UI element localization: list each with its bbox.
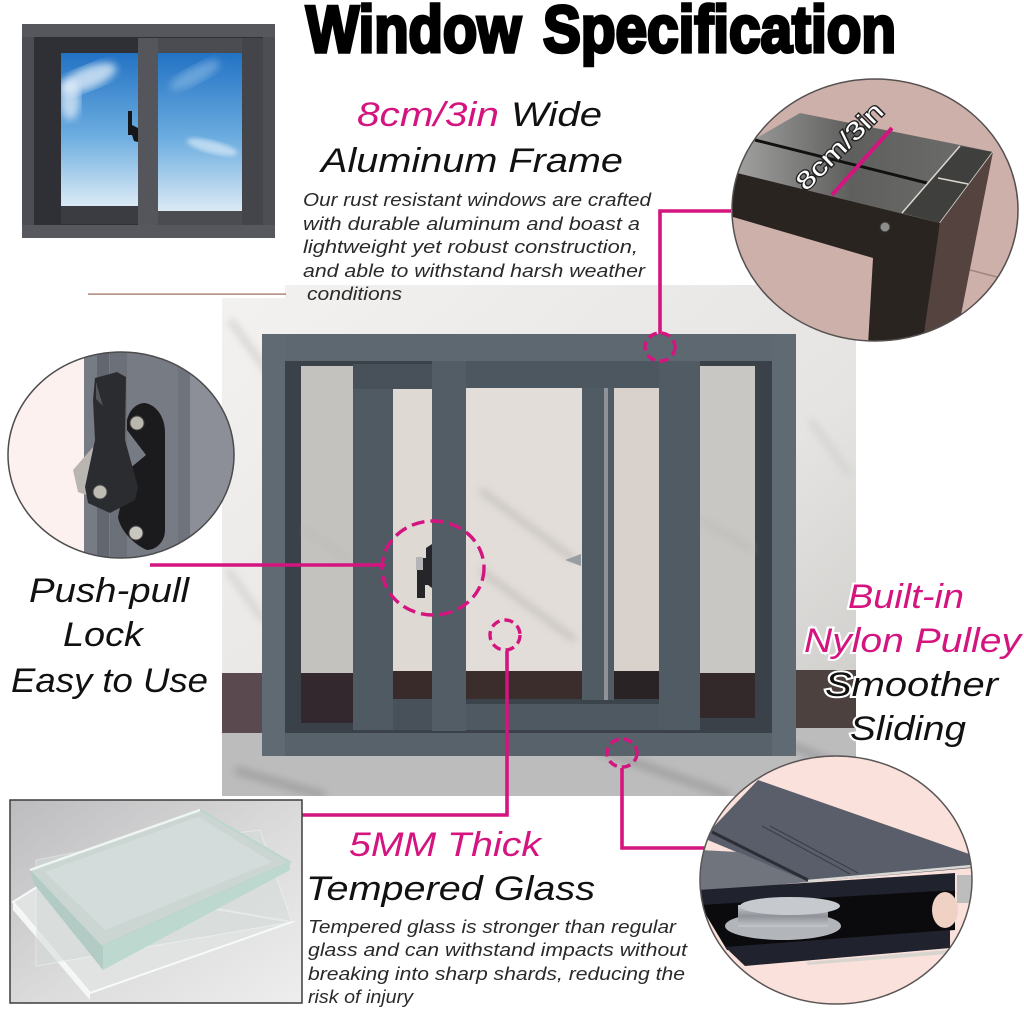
photo: tempered glass sheets — [10, 800, 302, 1003]
lever — [85, 372, 138, 513]
text block: glass description — [308, 917, 688, 1007]
marble wall photo background — [222, 285, 856, 796]
connector: frame callout — [645, 211, 731, 361]
text block: glass description: glass and can withstand impacts without — [308, 940, 688, 960]
heading: aluminum frame — [319, 96, 623, 180]
circle: frame corner detail — [725, 78, 1020, 345]
circle: lock detail — [8, 352, 238, 560]
icon: inner handle — [417, 544, 432, 598]
dimension label: 8cm/3in — [790, 97, 889, 196]
text block: frame description: conditions — [307, 284, 402, 304]
label: push-pull lock: Lock — [63, 616, 145, 654]
heading: aluminum frame: 8cm/3in — [357, 96, 499, 134]
heading: tempered glass — [306, 826, 595, 908]
label: nylon pulley — [804, 578, 1023, 748]
title — [306, 0, 896, 66]
label: nylon pulley: Nylon Pulley — [804, 622, 1023, 660]
label: nylon pulley: Sliding — [850, 710, 966, 748]
label: push-pull lock — [11, 572, 208, 700]
label: push-pull lock: Easy to Use — [11, 662, 208, 700]
text block: glass description: Tempered glass is stronger than regular — [308, 917, 677, 937]
heading: tempered glass: 5MM Thick — [349, 826, 543, 864]
heading: aluminum frame: Aluminum Frame — [319, 142, 623, 180]
screws — [130, 416, 144, 430]
label: push-pull lock: Push-pull — [29, 572, 191, 610]
text block: glass description: breaking into sharp shards, reducing the — [308, 964, 685, 984]
heading: tempered glass: Tempered Glass — [306, 870, 595, 908]
lock plate — [118, 403, 165, 550]
icon: latch keeper — [565, 554, 581, 566]
silver catch — [73, 447, 93, 497]
connector: lock callout — [150, 521, 484, 615]
icon: window handle — [128, 111, 138, 142]
text block: frame description: and able to withstand harsh weather — [303, 261, 646, 281]
label: nylon pulley: Built-in — [848, 578, 964, 616]
text block: glass description: risk of injury — [308, 987, 414, 1007]
text block: frame description: Our rust resistant windows are crafted — [303, 190, 652, 210]
label: nylon pulley: Smoother — [825, 666, 1000, 704]
panes — [301, 366, 755, 723]
main sliding window — [262, 334, 796, 756]
icon: pink dimension arrow — [832, 128, 892, 195]
pulley wheel — [725, 917, 841, 940]
thin divider line — [88, 294, 286, 295]
circle: pulley detail — [698, 754, 976, 1006]
text block: frame description: lightweight yet robust construction, — [303, 237, 638, 257]
text block: frame description: with durable aluminum and boast a — [303, 214, 640, 234]
text block: frame description — [303, 190, 652, 304]
photo: small sliding window with sky — [22, 24, 275, 238]
connector: pulley callout — [607, 739, 705, 848]
heading: aluminum frame: Wide — [511, 96, 602, 134]
connector: glass callout — [302, 620, 520, 815]
